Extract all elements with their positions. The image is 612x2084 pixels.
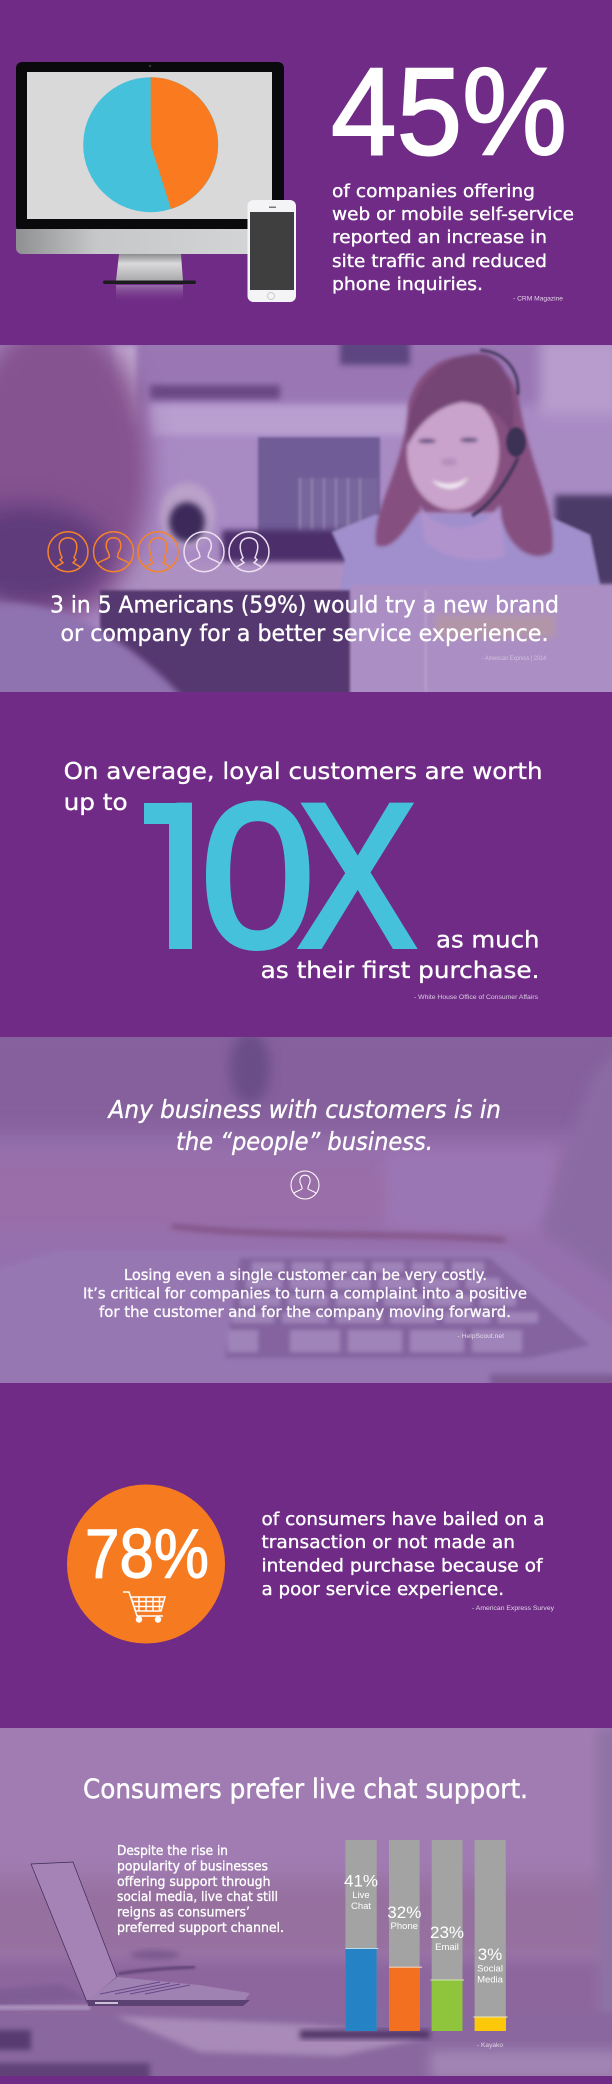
big stat 10X: 1 — [125, 762, 238, 990]
bar: social media 3%: 3% — [478, 1945, 502, 1964]
big stat 45%: 45% — [331, 44, 567, 182]
closing text: as much — [261, 928, 540, 984]
intro text: loyal customers: On average, loyal customers are worth — [64, 759, 543, 785]
panel: people business — [0, 1020, 612, 1400]
bar: phone 32% — [387, 1840, 422, 2031]
body text: self-service: phone inquiries. — [332, 274, 483, 295]
agent hair — [376, 354, 553, 560]
orange stat circle — [67, 1484, 225, 1644]
big stat 78%: 78% — [85, 1514, 209, 1592]
body text: 3 in 5 Americans: or company for a better service experience. — [60, 621, 548, 647]
bar: email 23%: 23% — [430, 1923, 464, 1942]
body text: self-service: of companies offering — [332, 181, 535, 202]
body text: social media vs live chat: Despite the rise in — [117, 1843, 228, 1859]
bar: live chat 41% — [344, 1840, 378, 2031]
intro text: loyal customers — [64, 759, 543, 816]
panel: call centre photo — [0, 320, 612, 700]
heading: people business: the “people” business. — [176, 1127, 433, 1156]
body text: bailed on a transaction: transaction or not made an — [262, 1532, 515, 1553]
body text: social media vs live chat: popularity of businesses — [117, 1858, 268, 1874]
photo: blurred laptop keyboard — [0, 1020, 612, 1400]
bar: social media 3%: Media — [477, 1974, 504, 1986]
body text: losing a customer — [83, 1266, 527, 1321]
intro text: loyal customers: up to — [64, 790, 128, 816]
body text: self-service: site traffic and reduced — [332, 251, 547, 272]
heading: people business: Any business with customers is in — [107, 1095, 501, 1124]
source: CRM Magazine: - CRM Magazine — [513, 296, 563, 302]
bar: email 23% — [430, 1840, 464, 2031]
body text: 3 in 5 Americans — [50, 592, 559, 647]
laptop — [31, 1862, 250, 2006]
big stat 10X: 0 — [201, 762, 314, 990]
body text: social media vs live chat — [117, 1843, 284, 1936]
closing text: as much: as their first purchase. — [261, 958, 540, 984]
body text: social media vs live chat: reigns as consumers’ — [117, 1905, 250, 1921]
body text: losing a customer: for the customer and for the company moving forward. — [99, 1303, 511, 1321]
body text: 3 in 5 Americans: 3 in 5 Americans (59%) would try a new brand — [50, 592, 559, 618]
icon: person — [291, 1171, 319, 1199]
body text: bailed on a transaction: intended purchase because of — [262, 1556, 543, 1576]
icon: shopping cart — [123, 1592, 165, 1622]
body text: self-service: reported an increase in — [332, 227, 547, 248]
big stat 10X: X — [298, 761, 416, 990]
body text: bailed on a transaction: of consumers have bailed on a — [262, 1509, 544, 1530]
body text: social media vs live chat: offering support through — [117, 1874, 270, 1890]
bar: live chat 41%: 41% — [344, 1872, 378, 1891]
bar chart: support channels — [344, 1840, 508, 2031]
body text: social media vs live chat: social media, live chat still — [117, 1889, 278, 1905]
source: Kayako: - Kayako — [477, 2042, 503, 2049]
heading: people business — [107, 1095, 501, 1156]
bar: social media 3%: Social — [477, 1964, 503, 1975]
bar: social media 3% — [474, 1840, 508, 2031]
body text: self-service: web or mobile self-service — [332, 204, 574, 225]
body text: social media vs live chat: preferred support channel. — [117, 1920, 284, 1936]
body text: losing a customer: Losing even a single customer can be very costly. — [124, 1266, 487, 1284]
bar: live chat 41%: Chat — [351, 1901, 371, 1912]
bar: live chat 41%: Live — [352, 1890, 370, 1901]
source: HelpScout: - HelpScout.net — [458, 1333, 504, 1340]
body text: bailed on a transaction — [262, 1509, 544, 1600]
body text: bailed on a transaction: a poor service experience. — [262, 1579, 504, 1600]
panel: 78% bailed — [67, 1484, 555, 1644]
bar: phone 32%: 32% — [387, 1903, 421, 1922]
pie chart — [83, 77, 218, 212]
panel: 45% self-service — [16, 44, 574, 304]
body text: losing a customer: It’s critical for companies to turn a complaint into a positive — [83, 1284, 527, 1302]
source: American Express Survey: - American Express Survey — [472, 1605, 555, 1612]
panel: live chat support — [0, 1728, 612, 2084]
icon: smartphone — [248, 200, 296, 302]
bar: email 23%: Email — [435, 1942, 459, 1953]
body text: self-service — [332, 181, 574, 295]
photo: blurred office with agent — [0, 320, 612, 700]
big stat 10X — [144, 800, 418, 951]
heading: live chat: Consumers prefer live chat support. — [83, 1774, 528, 1805]
bar: phone 32%: Phone — [391, 1921, 418, 1932]
panel: loyal customers 10X — [64, 759, 543, 1001]
source: American Express: - American Express | 2014 — [482, 655, 546, 662]
icon: desktop monitor with pie chart — [16, 62, 284, 304]
icons: 3 of 5 people — [48, 532, 269, 572]
photo: blurred desk with laptop — [0, 1728, 612, 2084]
source: White House: - White House Office of Consumer Affairs — [414, 994, 539, 1001]
closing text: as much: as much — [436, 928, 540, 954]
